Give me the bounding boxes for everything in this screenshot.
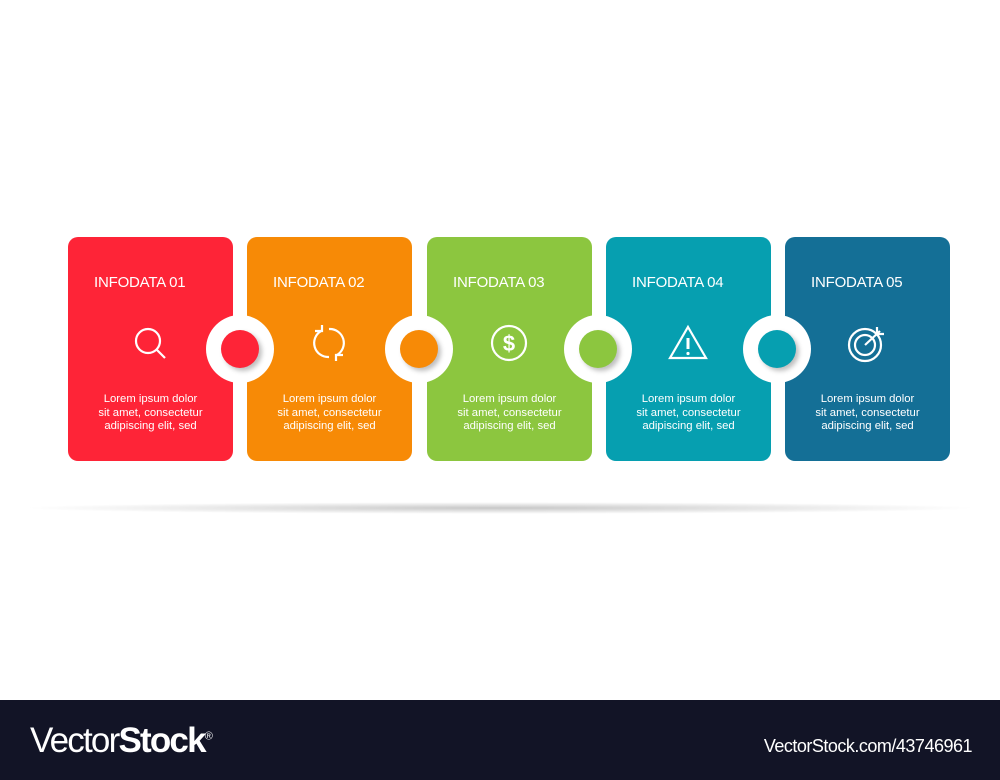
icon: target	[848, 327, 884, 362]
panel: infodata 01: adipiscing elit, sed	[104, 420, 197, 432]
floor shadow	[20, 502, 980, 514]
panel: infodata 01: Lorem ipsum dolor	[104, 393, 197, 405]
panel: infodata 04: INFODATA 04	[632, 274, 723, 291]
footer bar	[0, 700, 1000, 780]
panel: infodata 02	[247, 237, 412, 461]
panel: infodata 03: sit amet, consectetur	[457, 406, 562, 418]
panel: infodata 02: Lorem ipsum dolor	[283, 393, 376, 405]
panel: infodata 03: adipiscing elit, sed	[463, 420, 556, 432]
panel: infodata 03: INFODATA 03	[453, 274, 544, 291]
icon: refresh	[313, 325, 345, 361]
panel: infodata 02: adipiscing elit, sed	[283, 420, 376, 432]
image id: VectorStock.com/43746961	[764, 736, 972, 756]
panel: infodata 04	[606, 237, 771, 461]
icon: dollar	[490, 324, 528, 362]
panel: infodata 02: sit amet, consectetur	[277, 406, 382, 418]
panel: infodata 05: INFODATA 05	[811, 274, 902, 291]
logo: VectorStock®	[30, 721, 211, 760]
panel: infodata 02: INFODATA 02	[273, 274, 364, 291]
icon: warning	[668, 324, 708, 360]
connector 3	[564, 315, 632, 383]
panel: infodata 01: INFODATA 01	[94, 274, 185, 291]
panel: infodata 05: Lorem ipsum dolor	[821, 393, 914, 405]
panel: infodata 05: sit amet, consectetur	[815, 406, 920, 418]
connector 1	[206, 315, 274, 383]
panel: infodata 05	[785, 237, 950, 461]
icon: dollar: $	[503, 331, 515, 356]
panel: infodata 04: Lorem ipsum dolor	[642, 393, 735, 405]
panel: infodata 01: sit amet, consectetur	[98, 406, 203, 418]
panel: infodata 05: adipiscing elit, sed	[821, 420, 914, 432]
panel: infodata 03	[427, 237, 592, 461]
panel: infodata 04: sit amet, consectetur	[636, 406, 741, 418]
connector 2	[385, 315, 453, 383]
panel: infodata 01	[68, 237, 233, 461]
icon: magnifier	[134, 328, 166, 359]
connector 4	[743, 315, 811, 383]
panel: infodata 04: adipiscing elit, sed	[642, 420, 735, 432]
panel: infodata 03: Lorem ipsum dolor	[463, 393, 556, 405]
